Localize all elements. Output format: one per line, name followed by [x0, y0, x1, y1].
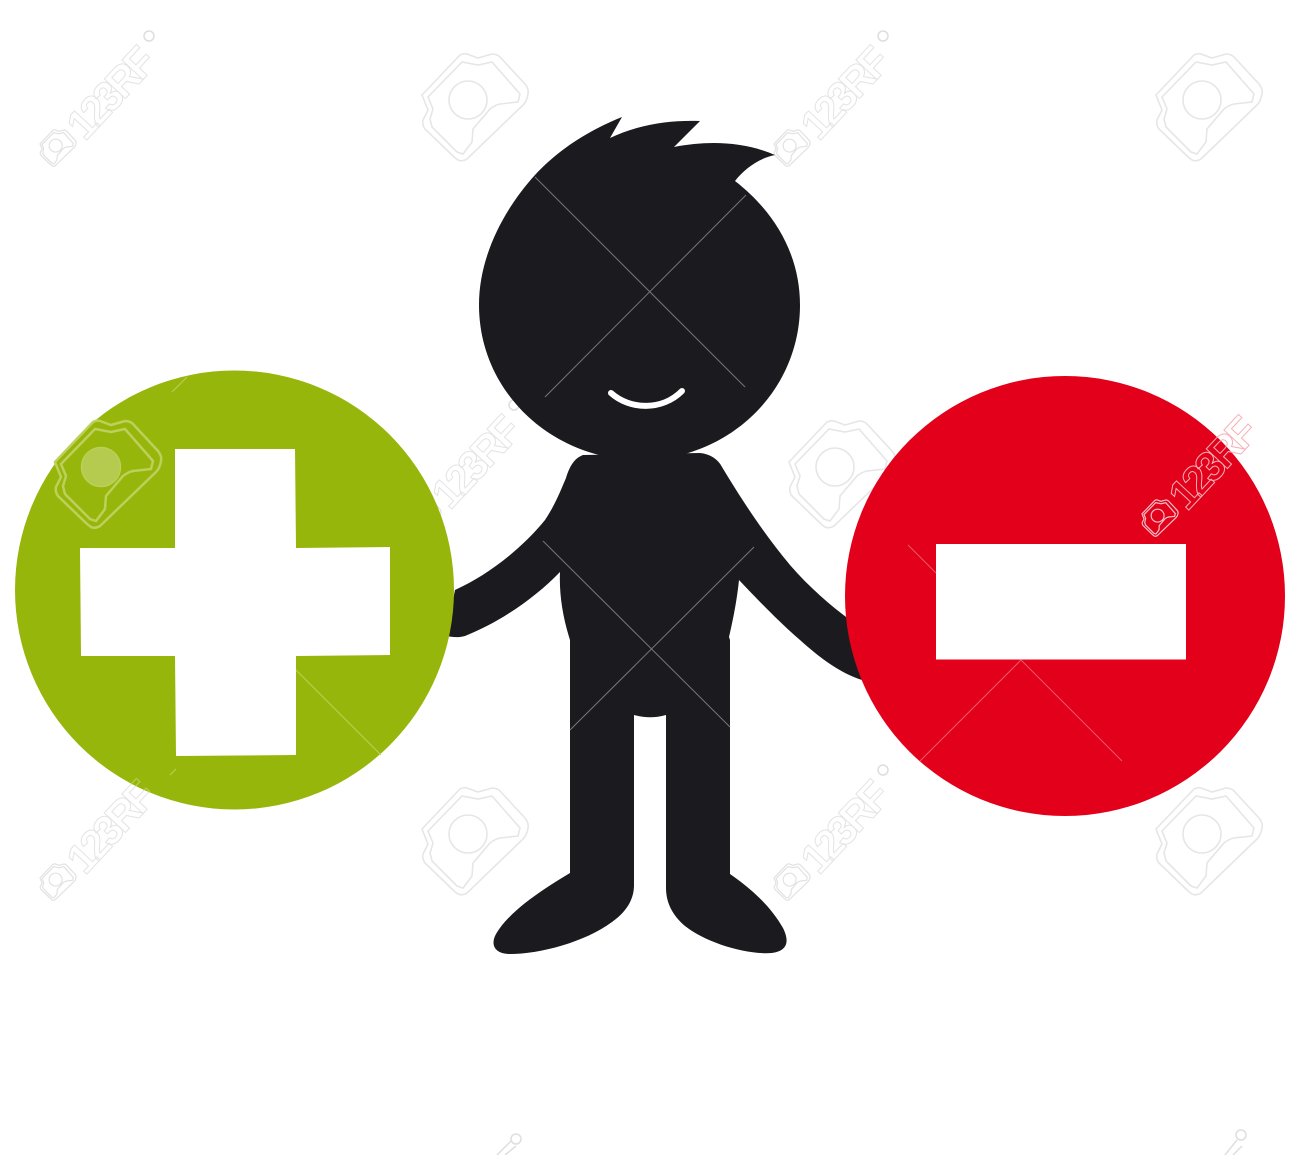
watermark text: 123RF	[57, 37, 165, 148]
head with hair	[479, 117, 800, 460]
watermark text: 123RF	[422, 406, 530, 517]
watermark diagonal lines	[170, 177, 1122, 775]
smile	[611, 391, 682, 406]
plus symbol	[80, 449, 390, 756]
watermark stamps	[422, 54, 1262, 895]
small watermark logos	[40, 130, 810, 900]
watermark logo over green circle	[55, 421, 161, 528]
plus sign circle	[15, 370, 454, 810]
body, arms and legs	[446, 453, 862, 954]
watermark text: 123RF	[57, 771, 165, 882]
watermark text: 123RF	[791, 37, 899, 148]
minus sign circle	[845, 376, 1285, 816]
figure silhouette	[446, 117, 862, 954]
watermark text	[57, 37, 899, 882]
watermark text over green circle: 123RF	[57, 771, 165, 882]
watermark text over red circle: 123RF	[1159, 407, 1267, 518]
watermark text: 123RF	[791, 771, 899, 882]
minus symbol	[936, 544, 1186, 660]
